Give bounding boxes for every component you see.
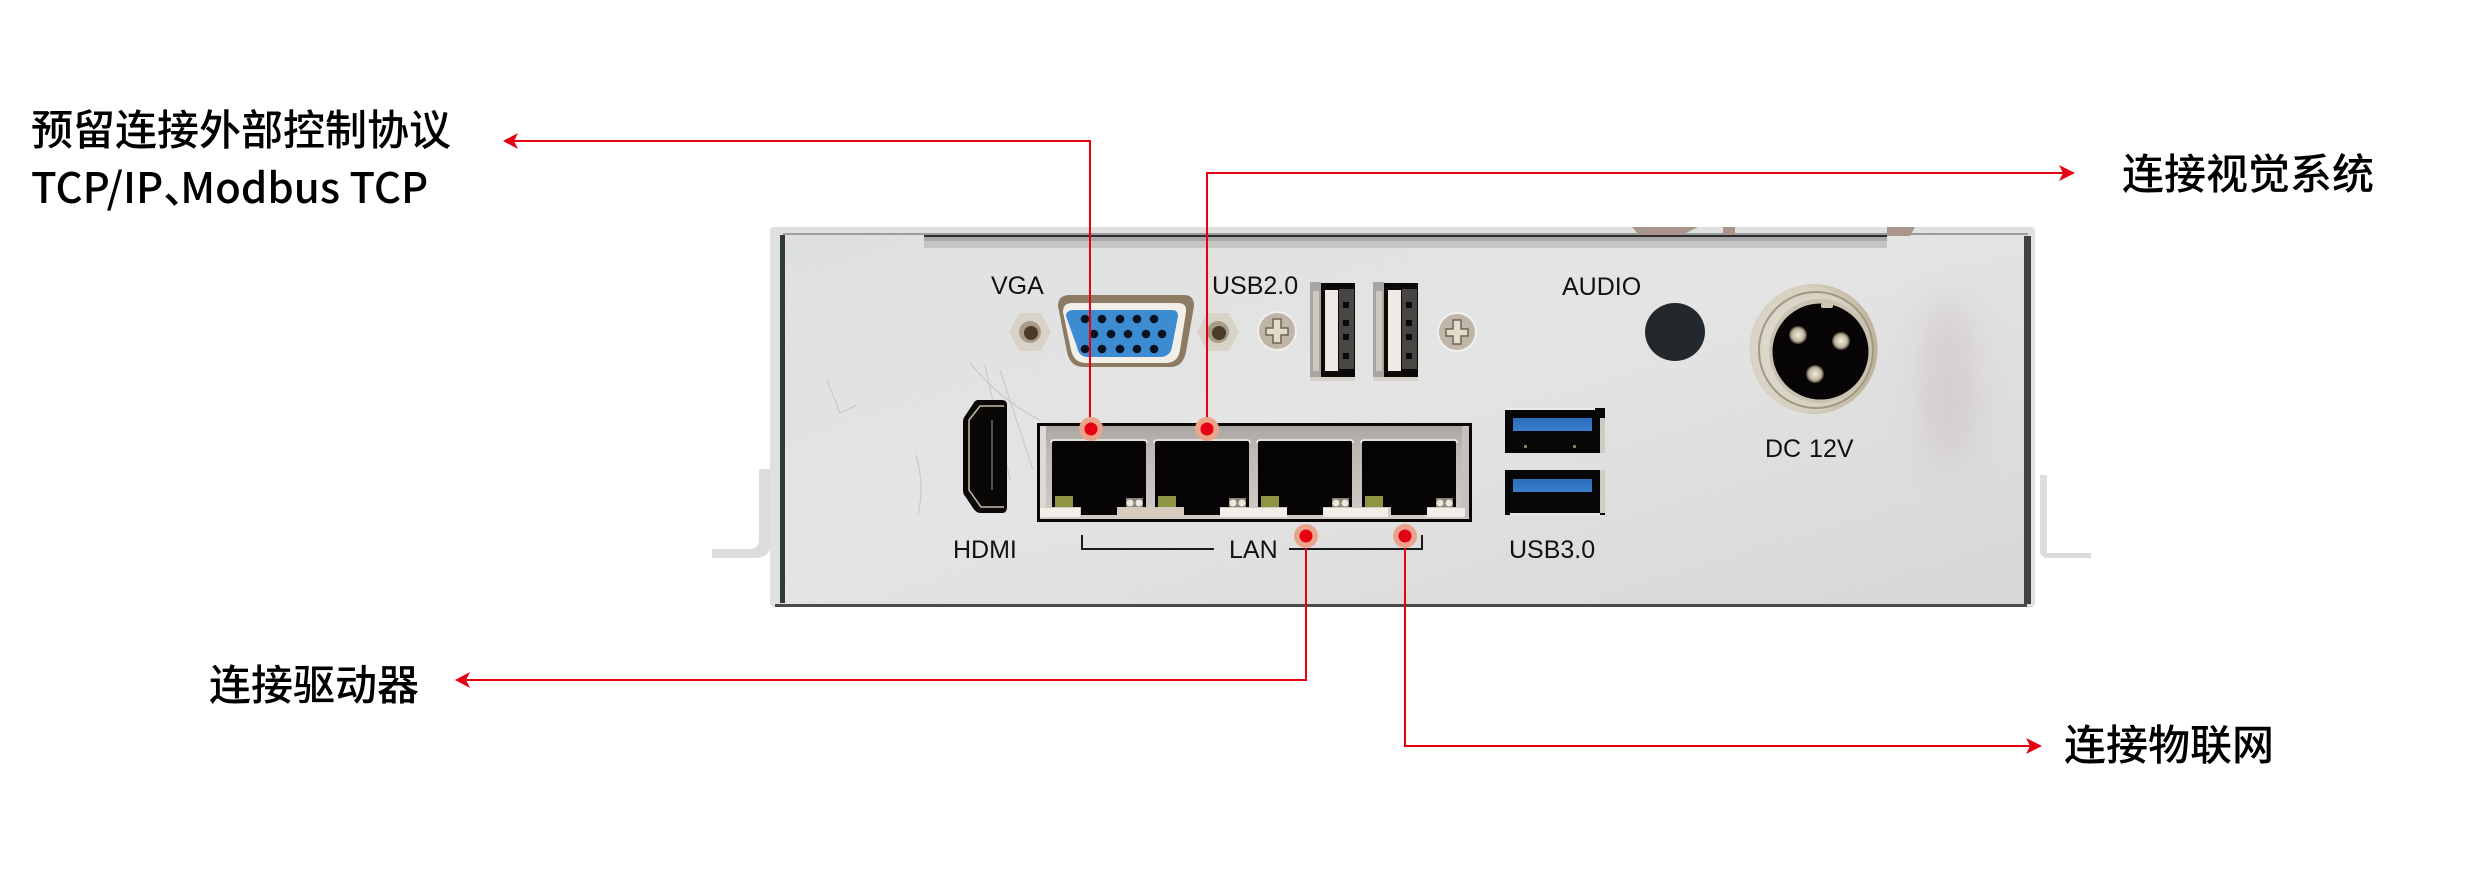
- label: USB2.0: USB2.0: [1212, 272, 1298, 300]
- label: DC 12V: DC 12V: [1765, 435, 1854, 463]
- RJ45 socket 4: [1361, 440, 1457, 515]
- callout text: reserved external control protocol: [31, 97, 451, 216]
- top slot: [924, 235, 1887, 248]
- label: AUDIO: AUDIO: [1562, 273, 1641, 301]
- HDMI port: [963, 400, 1007, 513]
- callout text: connect driver: 连接驱动器: [209, 652, 419, 713]
- standoff right: [1197, 313, 1239, 351]
- callout text: reserved external control protocol: TCP/IP、Modbus TCP: [31, 155, 428, 216]
- callout text: reserved external control protocol: 预留连接外部控制协议: [31, 97, 451, 158]
- standoff left: [1009, 313, 1051, 351]
- callout arrow: driver: [455, 524, 1318, 688]
- callout text: connect IoT: 连接物联网: [2064, 712, 2274, 773]
- callout arrow: vision system: [1195, 165, 2075, 441]
- RJ45 socket 2: [1154, 440, 1250, 515]
- LAN port block: [1038, 424, 1470, 520]
- audio jack: [1645, 303, 1705, 361]
- device rear panel: [770, 227, 2035, 607]
- USB3.0 port top: [1505, 408, 1605, 453]
- label: HDMI: HDMI: [953, 536, 1017, 564]
- screw left: [1257, 311, 1297, 351]
- USB2.0 ports: [1310, 282, 1418, 381]
- VGA port: [1009, 295, 1239, 367]
- LAN bracket: [1082, 535, 1422, 549]
- callout arrow: IoT: [1393, 524, 2042, 754]
- tan lower tab: [1117, 508, 1183, 517]
- RJ45 socket 3: [1257, 440, 1353, 515]
- label: USB3.0: USB3.0: [1509, 536, 1595, 564]
- label: LAN: LAN: [1229, 536, 1278, 564]
- white lower tabs: [1040, 508, 1465, 517]
- label: VGA: VGA: [991, 272, 1044, 300]
- screw right: [1437, 312, 1477, 352]
- USB3.0 port bottom: [1505, 470, 1605, 515]
- DC 12V connector: [1750, 284, 1878, 414]
- mounting tab: right: [2040, 475, 2091, 558]
- callout text: connect vision system: 连接视觉系统: [2122, 141, 2374, 202]
- mounting tab: left: [712, 469, 771, 558]
- RJ45 socket 1: [1051, 440, 1147, 515]
- callout arrow: reserved control protocol: [503, 133, 1103, 441]
